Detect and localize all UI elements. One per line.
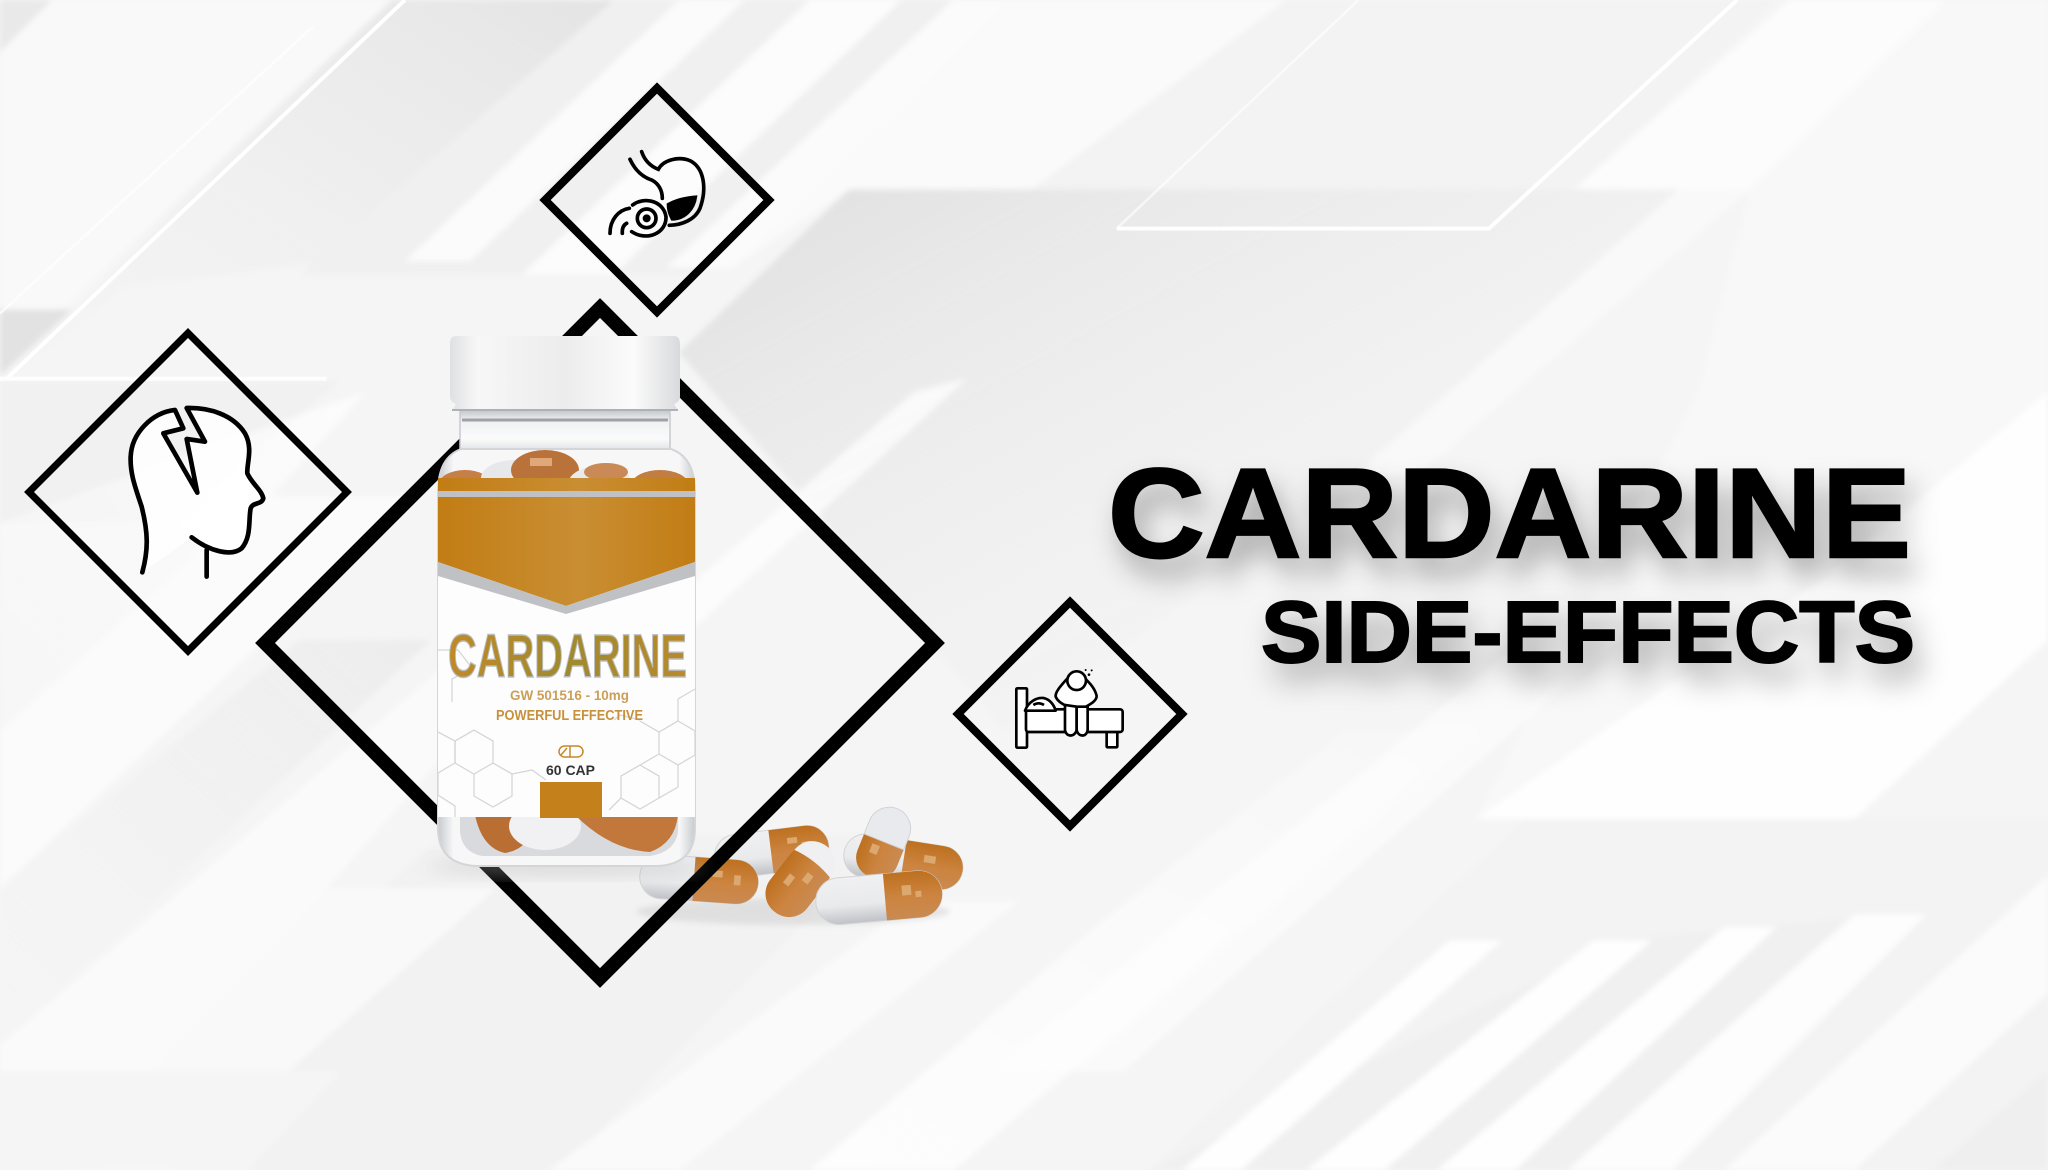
title: Cardarine: CARDARINE bbox=[1108, 442, 1911, 584]
orange label band bbox=[438, 478, 695, 606]
label hexagon pattern bbox=[438, 650, 695, 817]
icon: stomach with pain rings bbox=[610, 152, 704, 236]
pill: front centre bbox=[814, 869, 944, 926]
pills scattered next to the bottle bbox=[637, 801, 966, 926]
pill: small tilted bbox=[756, 832, 845, 926]
icon: small capsule bbox=[559, 746, 583, 757]
pill: front left bbox=[638, 853, 760, 905]
pill: rear left bbox=[712, 823, 831, 880]
capsules visible at top of jar bbox=[442, 450, 686, 478]
icon panel: fatigue diamond bbox=[958, 602, 1182, 826]
bottle neck bbox=[460, 408, 670, 449]
pill: upright bbox=[850, 801, 917, 885]
bottle cap bbox=[450, 336, 680, 411]
cap rim line bbox=[452, 409, 678, 411]
bottle bbox=[426, 336, 706, 874]
label dosage: GW 501516 - 10mg bbox=[510, 687, 629, 703]
glass body bbox=[438, 449, 695, 866]
capsules visible at bottom of jar bbox=[460, 817, 678, 856]
icon panel: stomach diamond bbox=[545, 88, 769, 312]
pill: rear right bbox=[841, 831, 966, 892]
silver label stripes bbox=[438, 491, 695, 614]
icon: tired person sitting on bed bbox=[1016, 669, 1123, 748]
subtitle: side-effects: SIDE-EFFECTS bbox=[1261, 584, 1915, 681]
white label lower section bbox=[438, 560, 695, 817]
title block bbox=[1108, 442, 1915, 681]
icon panel: headache diamond bbox=[29, 333, 347, 651]
label product name: CARDARINE bbox=[448, 622, 687, 690]
label count: 60 CAP bbox=[546, 762, 595, 778]
label orange box bbox=[540, 782, 602, 818]
label tagline: POWERFUL EFFECTIVE bbox=[496, 708, 643, 724]
large diamond frame bbox=[265, 308, 935, 978]
icon: head with lightning bolt bbox=[131, 408, 263, 577]
